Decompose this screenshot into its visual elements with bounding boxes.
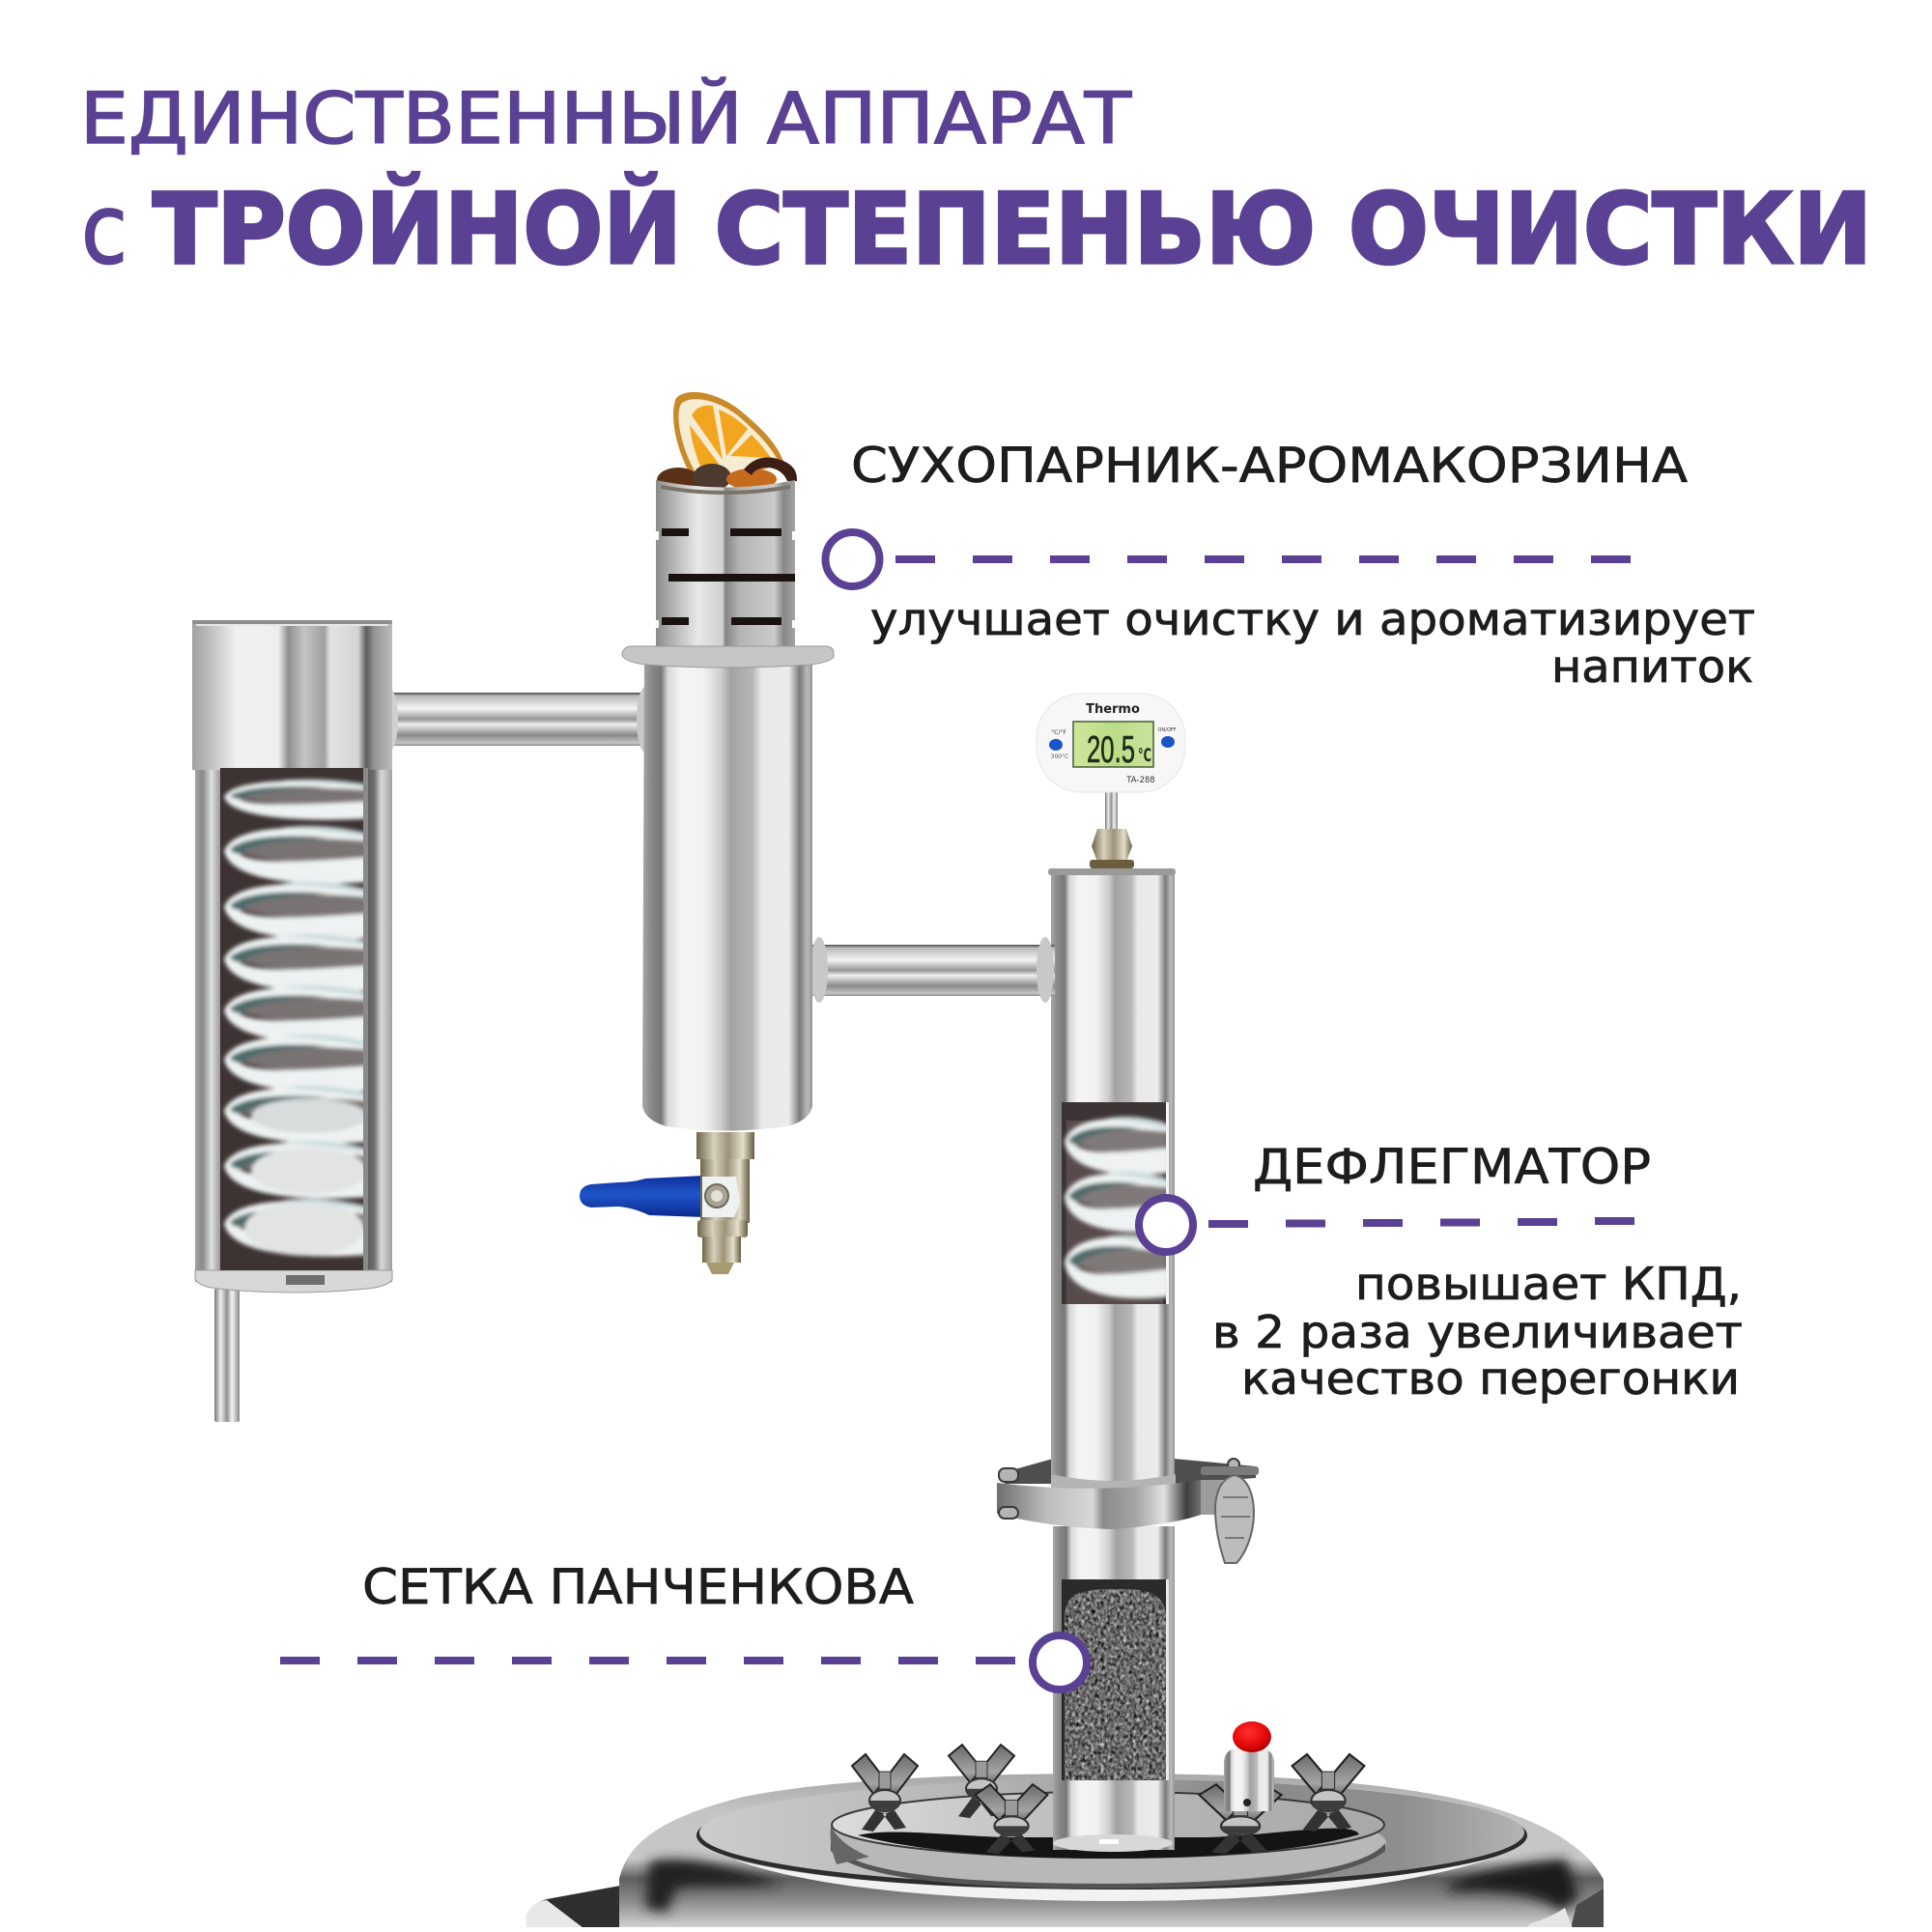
lid bright bottom rim (734, 1857, 1497, 1901)
condenser left wall (195, 770, 220, 1282)
leader line (1208, 1217, 1634, 1228)
brass nut (697, 1220, 748, 1237)
dome shadows (645, 1860, 1578, 1913)
range label: 300°C (1051, 753, 1068, 760)
title line 2: с (81, 173, 128, 286)
model label: TA-288 (1125, 776, 1155, 785)
red cap (1233, 1721, 1271, 1752)
nozzle (702, 1236, 741, 1263)
ball valve (580, 1132, 754, 1274)
dried orange slice (673, 392, 784, 487)
brand label: Thermo (1086, 702, 1140, 717)
outlet tube (214, 1289, 240, 1422)
marker (1139, 1198, 1193, 1252)
title (80, 77, 1872, 286)
wing nut 5 (1293, 1754, 1364, 1832)
basket body (656, 480, 795, 651)
button right (1161, 736, 1175, 748)
valve body (1224, 1748, 1274, 1811)
title line 1: ЕДИНСТВЕННЫЙ АППАРАТ (80, 77, 1131, 160)
thermometer case (1037, 694, 1185, 792)
blue handle (580, 1176, 704, 1217)
kettle body with lid (526, 1774, 1604, 1928)
flange plate (830, 1792, 1386, 1889)
callout text line 2: напиток (1551, 640, 1753, 693)
callout heading: СУХОПАРНИК-АРОМАКОРЗИНА (851, 438, 1688, 494)
scale label left: °C/°F (1051, 729, 1066, 736)
callout text line 3: качество перегонки (1241, 1352, 1740, 1405)
lcd unit: °C (1138, 745, 1151, 766)
panchenkov mesh window (1062, 1579, 1169, 1780)
scale label right: ON/OFF (1157, 727, 1177, 733)
callout text line 1: улучшает очистку и ароматизирует (870, 593, 1755, 645)
upper connecting pipe (379, 687, 654, 753)
basket slots (662, 528, 795, 625)
button left (1049, 739, 1063, 751)
white plate (702, 1177, 740, 1217)
left condenser (192, 620, 392, 1422)
callout heading: СЕТКА ПАНЧЕНКОВА (362, 1559, 914, 1615)
callout heading: ДЕФЛЕГМАТОР (1253, 1139, 1651, 1195)
condenser upper shell (192, 620, 392, 770)
right column upper section (1048, 868, 1176, 1498)
wing nuts (852, 1745, 1364, 1854)
left handle (526, 1886, 620, 1928)
clamp neck ring (1051, 1474, 1176, 1493)
valve collar (696, 1132, 754, 1159)
thermometer (1037, 694, 1185, 868)
kettle dome (619, 1774, 1604, 1928)
callout: panchenkov mesh (280, 1559, 1087, 1690)
callout: dephlegmator (1139, 1139, 1743, 1405)
callout text line 2: в 2 раза увеличивает (1212, 1306, 1743, 1358)
lcd screen (1073, 722, 1153, 767)
window inner strip (363, 768, 368, 1270)
condenser bottom cap (195, 1270, 392, 1293)
wing nut 1 (852, 1754, 918, 1832)
title line 2: ТРОЙНОЙ СТЕПЕНЬЮ ОЧИСТКИ (153, 171, 1872, 286)
aroma basket (655, 392, 797, 651)
lower connecting pipe (808, 937, 1055, 1003)
dephlegmator coil window (1062, 1102, 1169, 1304)
right column lower section with mesh window (1053, 1526, 1175, 1852)
clamp band (997, 1480, 1201, 1529)
leader line (895, 555, 1631, 563)
leader line (280, 1657, 1015, 1664)
marker (1033, 1635, 1087, 1690)
brass gland nut (1090, 829, 1134, 868)
lcd reading: 20.5 (1087, 729, 1135, 771)
column body (642, 662, 812, 1130)
marker (825, 532, 879, 586)
tri-clamp with wing handle (997, 1459, 1259, 1563)
condenser coil window (220, 768, 369, 1270)
clamp bolts (999, 1459, 1239, 1519)
stepped lid (696, 1826, 1527, 1889)
condenser right wall (368, 770, 392, 1282)
right handle (1526, 1889, 1604, 1928)
spices (657, 458, 797, 493)
flange (622, 646, 834, 668)
wing nut 2 (949, 1745, 1014, 1818)
valve body (700, 1159, 750, 1223)
hinge bar (1201, 1466, 1259, 1475)
hex bolt (705, 1184, 728, 1208)
clamp rear plates (1005, 1459, 1256, 1484)
wing handle (1215, 1475, 1254, 1563)
thermometer stem (1105, 790, 1118, 829)
basket side notches (655, 531, 796, 628)
safety valve with red cap (1224, 1721, 1274, 1811)
wing nut 4 (1200, 1784, 1281, 1854)
callout: aroma basket (825, 438, 1755, 693)
middle column (622, 646, 834, 1130)
nozzle tip (706, 1263, 734, 1274)
callout text line 1: повышает КПД, (1355, 1258, 1742, 1310)
wing nut 3 (976, 1784, 1047, 1854)
